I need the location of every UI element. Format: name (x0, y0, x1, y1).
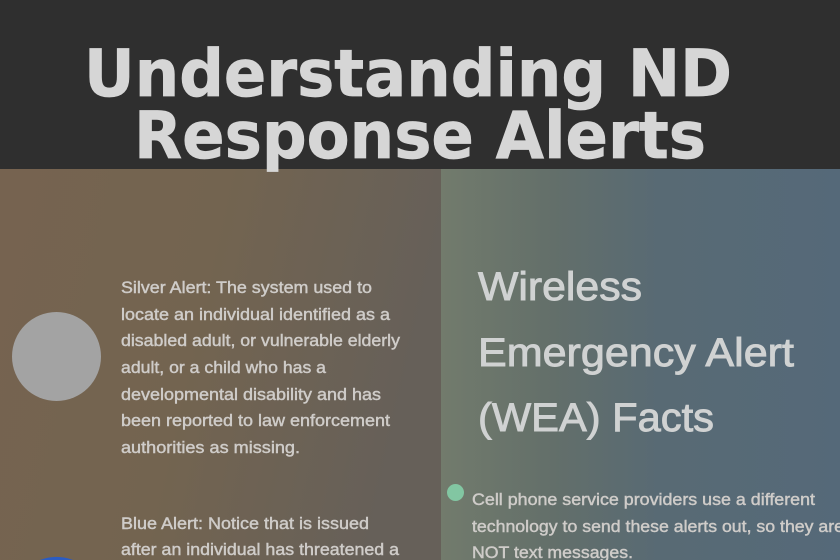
text: silver alert: disabled adult, or vulnerable elderly (121, 331, 401, 350)
title (84, 37, 732, 174)
text: blue alert: after an individual has threatened a (121, 540, 400, 559)
title: Understanding ND (84, 37, 732, 112)
icon: silver alert circle (12, 312, 101, 401)
heading: WEA facts: Emergency Alert (478, 331, 794, 375)
text: cell phone fact: Cell phone service providers use a different (472, 490, 815, 509)
text: silver alert: authorities as missing. (121, 438, 300, 457)
heading: WEA facts (478, 265, 794, 440)
text: cell phone fact (472, 490, 840, 560)
text: silver alert: been reported to law enforcement (121, 411, 390, 430)
heading: WEA facts: Wireless (478, 265, 642, 309)
text: silver alert: developmental disability and has (121, 385, 381, 404)
header band (0, 0, 840, 169)
title: Response Alerts (134, 99, 706, 174)
icon: green bullet (447, 484, 464, 501)
text: silver alert: locate an individual identified as a (121, 305, 391, 324)
text: silver alert: adult, or a child who has a (121, 358, 327, 377)
text: blue alert (121, 514, 400, 559)
icon: blue alert circle (40, 557, 73, 560)
panel: alert types (0, 169, 441, 560)
panel: WEA facts (441, 169, 840, 560)
text: silver alert (121, 278, 401, 457)
text: cell phone fact: technology to send these alerts out, so they are (472, 517, 840, 536)
heading: WEA facts: (WEA) Facts (478, 396, 714, 440)
text: blue alert: Blue Alert: Notice that is issued (121, 514, 369, 533)
text: silver alert: Silver Alert: The system used to (121, 278, 372, 297)
